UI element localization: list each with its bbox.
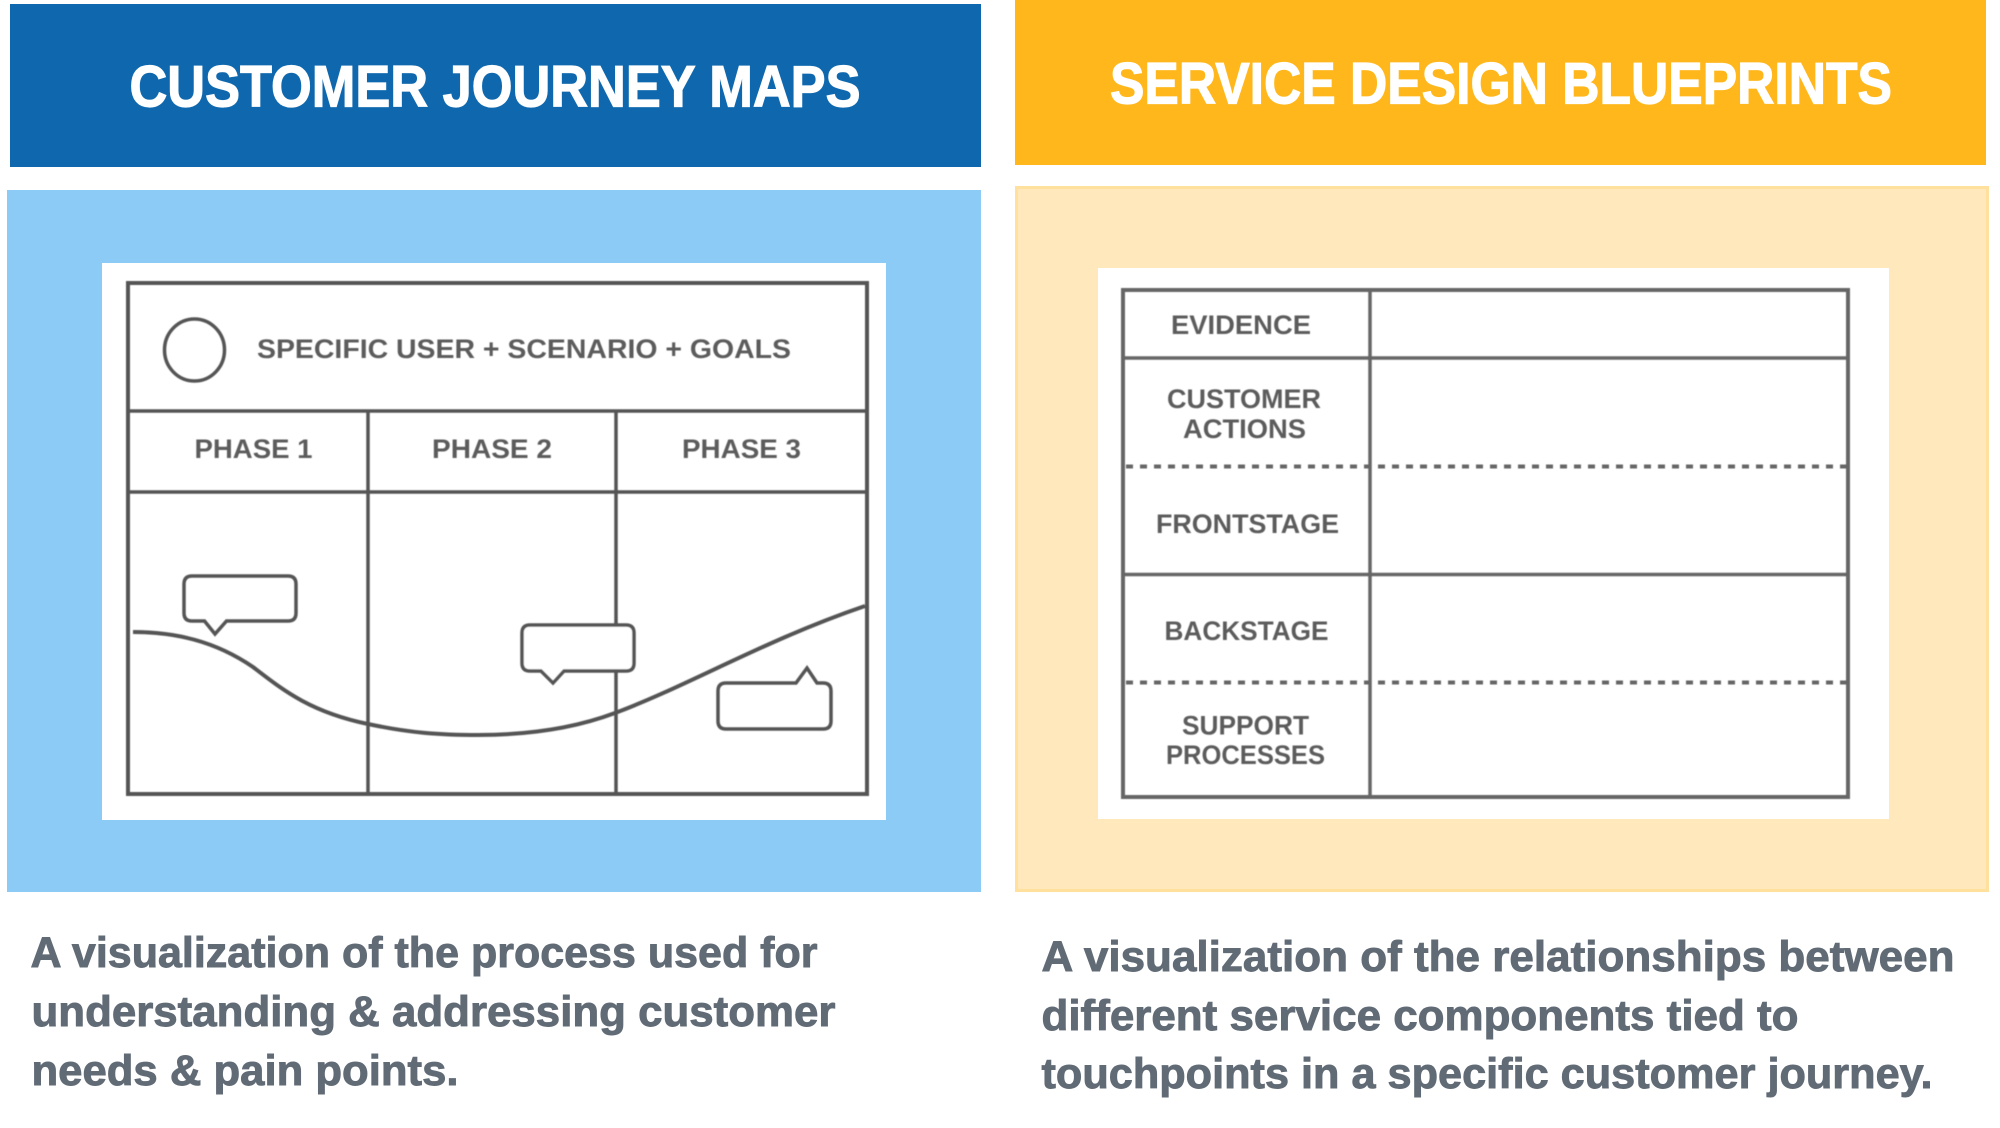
label: customer actions bbox=[1167, 384, 1321, 444]
light blue background panel bbox=[7, 190, 981, 892]
speech bubble 1 bbox=[184, 576, 296, 634]
label: frontstage: FRONTSTAGE bbox=[1156, 509, 1339, 539]
icon: user circle bbox=[164, 319, 224, 381]
label: phase 2: PHASE 2 bbox=[432, 434, 552, 464]
speech bubble 3 bbox=[718, 668, 831, 729]
journey map diagram bbox=[102, 263, 886, 820]
heading: customer journey maps bbox=[10, 4, 981, 167]
label: customer actions: ACTIONS bbox=[1183, 414, 1306, 444]
label: support processes: SUPPORT bbox=[1182, 710, 1309, 740]
label: customer actions: CUSTOMER bbox=[1167, 384, 1321, 414]
description: customer journey maps: understanding & addressing customer bbox=[32, 988, 836, 1036]
speech bubble 2 bbox=[522, 625, 634, 683]
heading: service design blueprints bbox=[1015, 0, 1986, 165]
panel: service design blueprints bbox=[1015, 0, 1988, 1098]
label: support processes bbox=[1166, 710, 1325, 770]
heading: customer journey maps: CUSTOMER JOURNEY MAPS bbox=[130, 54, 860, 120]
description: customer journey maps: needs & pain points. bbox=[32, 1047, 458, 1095]
label: phase 1: PHASE 1 bbox=[194, 434, 312, 464]
label: phase 3: PHASE 3 bbox=[682, 434, 801, 464]
panel: customer journey maps bbox=[7, 4, 981, 1095]
label: support processes: PROCESSES bbox=[1166, 740, 1325, 770]
description: service design blueprints bbox=[1042, 933, 1954, 1098]
heading: service design blueprints: SERVICE DESIGN BLUEPRINTS bbox=[1110, 52, 1892, 116]
cream background panel bbox=[1016, 188, 1988, 890]
label: evidence: EVIDENCE bbox=[1171, 310, 1311, 340]
journey curve bbox=[133, 606, 865, 735]
description: customer journey maps: A visualization of the process used for bbox=[30, 929, 818, 977]
label: user scenario goals: SPECIFIC USER + SCENARIO + GOALS bbox=[257, 334, 791, 364]
description: service design blueprints: different service components tied to bbox=[1042, 992, 1798, 1040]
description: service design blueprints: touchpoints in a specific customer journey. bbox=[1042, 1050, 1932, 1098]
label: backstage: BACKSTAGE bbox=[1164, 616, 1328, 646]
blueprint diagram bbox=[1098, 268, 1889, 819]
description: customer journey maps bbox=[30, 929, 836, 1095]
description: service design blueprints: A visualization of the relationships between bbox=[1042, 933, 1954, 981]
